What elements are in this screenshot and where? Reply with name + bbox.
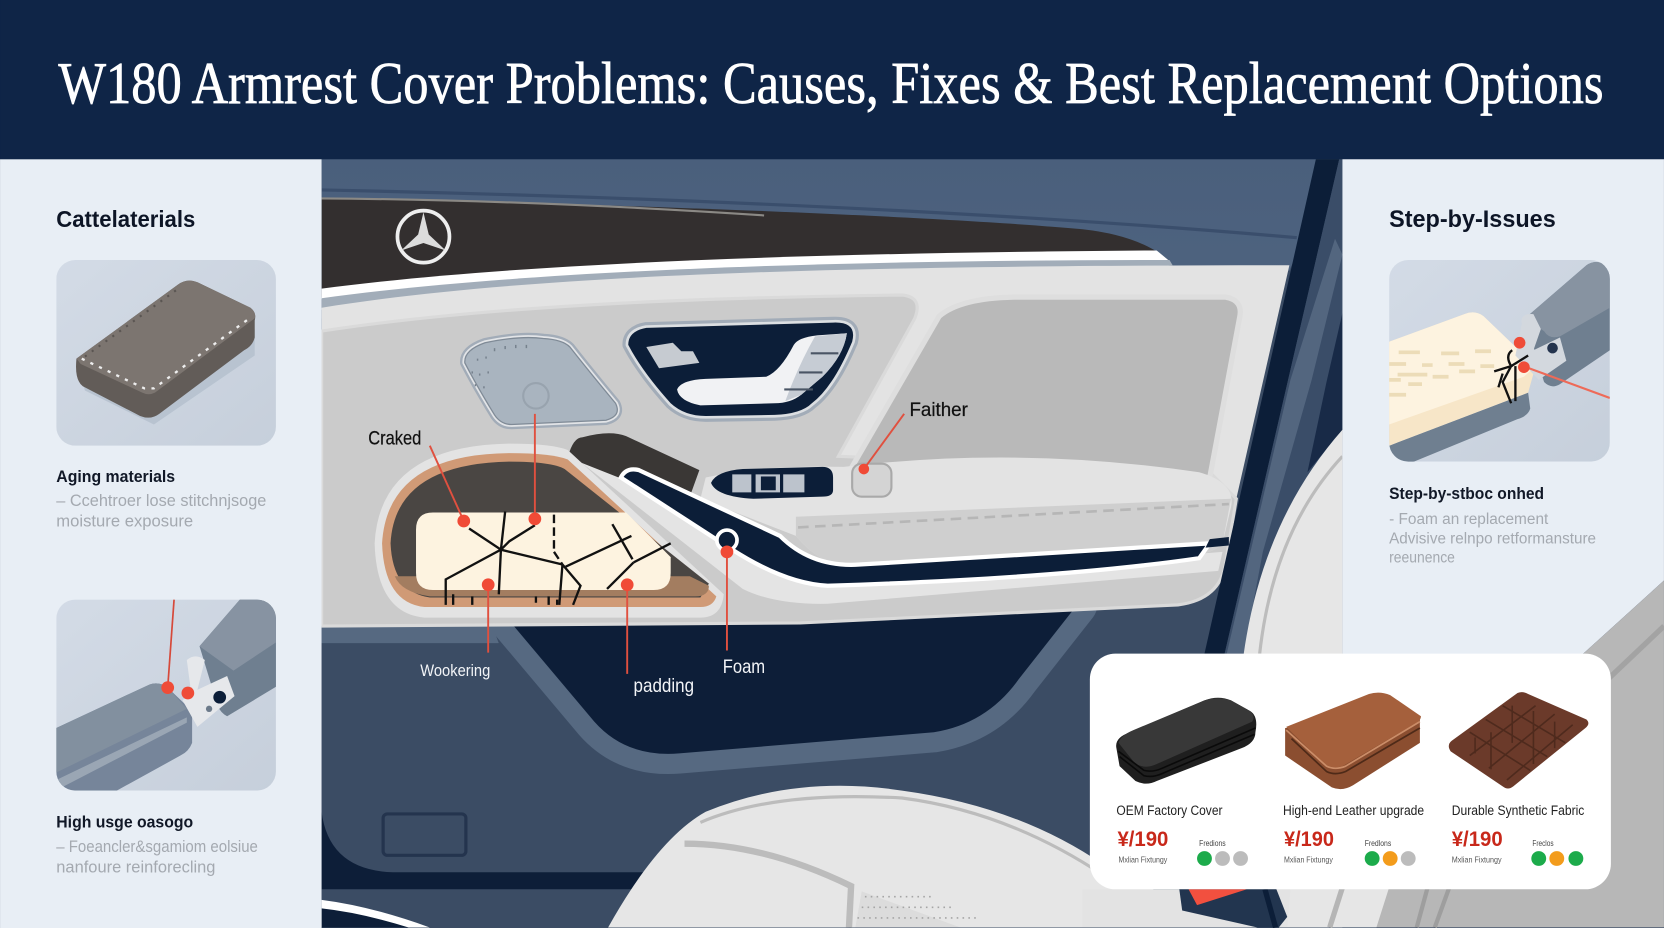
option: high-end leather upgrade: Mxlian Fixtungy [1284, 855, 1334, 865]
label: faither: Faither [909, 400, 968, 421]
option: durable synthetic fabric [1449, 692, 1588, 866]
door storage recess [383, 814, 466, 855]
label: cracked: Craked [368, 429, 421, 450]
option: durable synthetic fabric: ¥/190 [1452, 828, 1503, 851]
option: OEM factory cover: OEM Factory Cover [1116, 803, 1223, 818]
callout labels with leader lines [368, 400, 968, 697]
text: aging materials: Aging materials [56, 467, 175, 486]
text: high usage [56, 813, 258, 876]
option: durable synthetic fabric: Durable Synthetic Fabric [1452, 803, 1584, 818]
product image: black cover [1116, 698, 1256, 784]
pillar [1204, 159, 1342, 654]
label: weakening: Wookering [420, 661, 490, 680]
cutaway: damaged armrest [375, 444, 724, 618]
cracks [446, 511, 671, 605]
label: padding: padding [634, 676, 694, 697]
product image: brown leather cover [1285, 693, 1421, 789]
armrest [701, 458, 1232, 550]
option: high-end leather upgrade: ¥/190 [1284, 828, 1334, 851]
option: durable synthetic fabric: Freclos [1532, 839, 1554, 848]
door handle [628, 323, 853, 416]
title banner [0, 0, 1664, 159]
panel: replacement options [1090, 654, 1611, 889]
armrest lip [568, 452, 1223, 604]
grey seat corner [1376, 580, 1664, 927]
door illustration [322, 159, 1342, 928]
option: OEM factory cover: Fredions [1199, 839, 1226, 848]
armrest dark end [568, 433, 699, 497]
foam block [416, 513, 671, 590]
lower door pocket [322, 605, 1077, 754]
text: aging materials [56, 467, 266, 530]
heading: right panel: Step-by-Issues [1389, 206, 1556, 233]
text: high usage: – Foeancler&sgamiom eolsiue [56, 838, 258, 856]
lower console [1179, 887, 1287, 927]
card: worn armrest pad [56, 260, 276, 446]
card: worn hinge [56, 600, 278, 791]
option: OEM factory cover: Mxlian Fixtungy [1119, 855, 1168, 865]
option: OEM factory cover [1116, 698, 1256, 866]
text: step by step fixes: reeunence [1389, 549, 1455, 566]
card: foam repair [1389, 260, 1610, 463]
heading: left panel: Cattelaterials [56, 206, 195, 232]
text: high usage: High usge oasogo [56, 813, 193, 832]
text: step by step fixes [1389, 484, 1596, 566]
armrest button [852, 464, 891, 497]
option: high-end leather upgrade: High-end Leather upgrade [1283, 803, 1424, 818]
white ring [717, 530, 737, 550]
black trim with logo [322, 198, 1169, 297]
text: step by step fixes: - Foam an replacement [1389, 511, 1549, 528]
lower navy band [322, 812, 643, 890]
text: high usage: nanfoure reinforecling [56, 858, 215, 876]
panel: left causes [0, 159, 322, 928]
text: step by step fixes: Advisive relnpo retformansture [1389, 530, 1596, 547]
door panel body [322, 265, 1289, 626]
right seat background [1082, 430, 1401, 927]
product image: quilted fabric cover [1449, 692, 1588, 788]
text: step by step fixes: Step-by-stboc onhed [1389, 484, 1544, 503]
text: aging materials: – Ccehtroer lose stitchnjsoge [56, 492, 266, 510]
text: aging materials: moisture exposure [56, 512, 193, 530]
option: high-end leather upgrade: Fredlons [1365, 839, 1391, 848]
seat [608, 786, 1154, 928]
navy armrest strip [621, 469, 1210, 586]
window panel [849, 297, 1240, 478]
label: foam: Foam [723, 657, 765, 678]
vent panel [465, 338, 617, 424]
option: high-end leather upgrade [1283, 693, 1424, 866]
icon: three-pointed star logo [397, 211, 449, 263]
option: OEM factory cover: ¥/190 [1117, 828, 1168, 851]
panel: right fixes [1342, 159, 1664, 679]
option: durable synthetic fabric: Mxlian Fixtungy [1452, 855, 1502, 865]
window switch [711, 467, 833, 499]
